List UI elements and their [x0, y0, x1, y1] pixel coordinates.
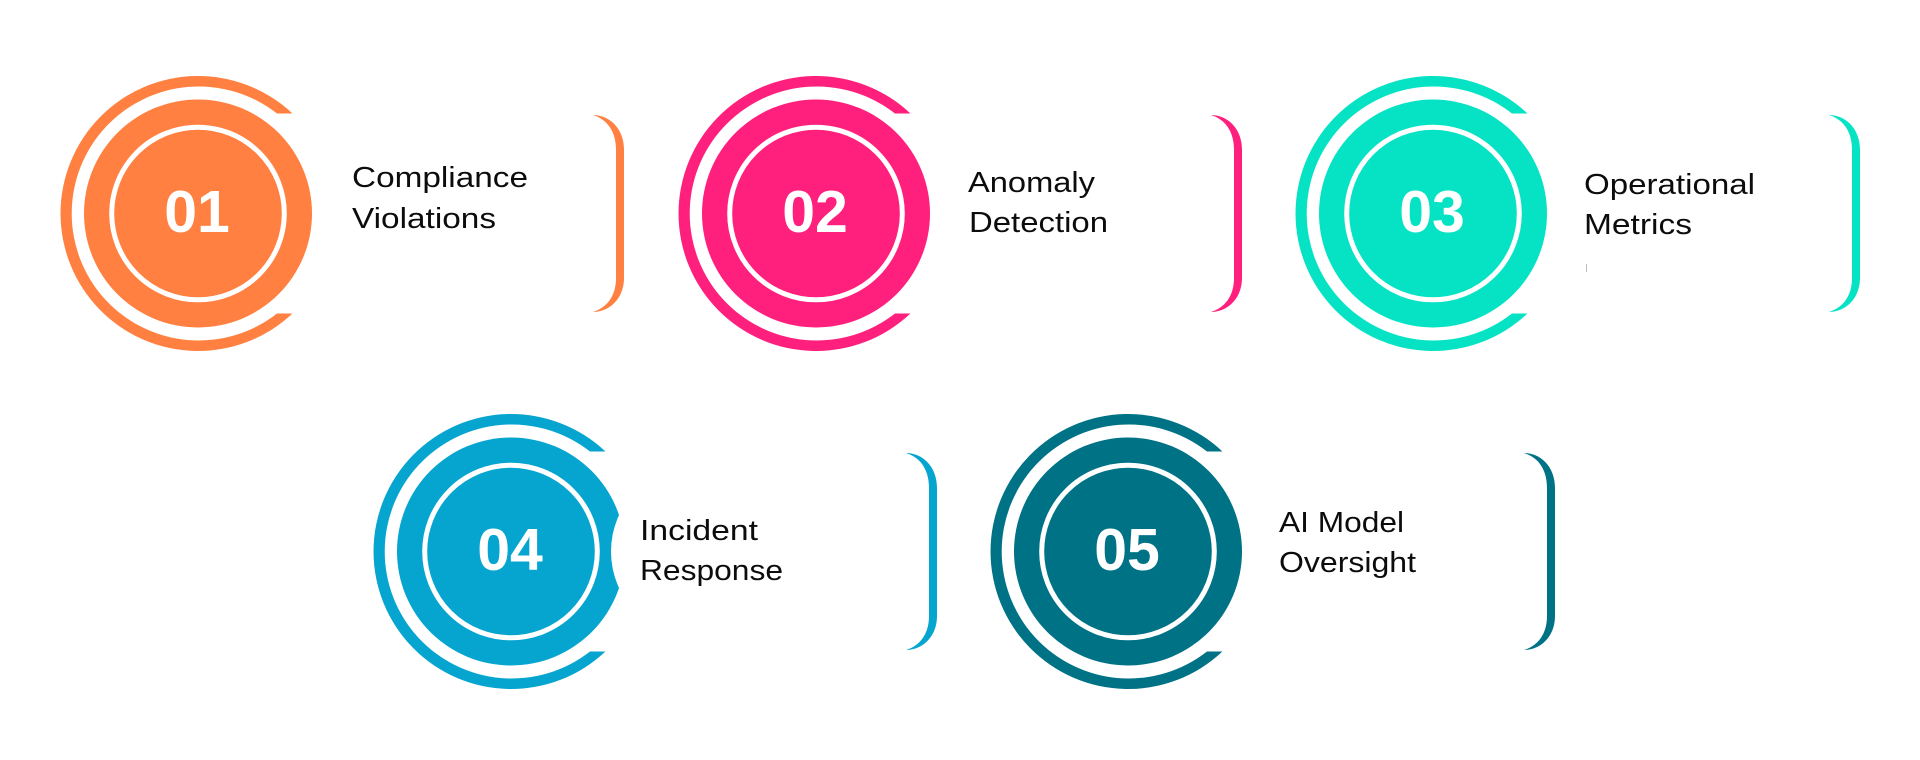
- bracket 02: [1211, 115, 1242, 312]
- label: Operational Metrics: [1584, 169, 1755, 241]
- item 03: Operational Metrics: [1296, 76, 1860, 351]
- badge 02: 02: [782, 179, 848, 245]
- label: Incident Response: Incident: [640, 515, 758, 547]
- label: AI Model Oversight: [1279, 507, 1416, 579]
- label: Anomaly Detection: Anomaly: [968, 167, 1096, 199]
- item 05: AI Model Oversight: [991, 414, 1555, 689]
- label: Anomaly Detection: Detection: [969, 207, 1108, 239]
- label: Incident Response: [640, 515, 783, 587]
- label: AI Model Oversight: Oversight: [1279, 547, 1416, 579]
- bracket 05: [1524, 453, 1555, 650]
- badge 05: [991, 414, 1242, 689]
- item 01: Compliance Violations: [61, 76, 624, 351]
- badge 04: 04: [477, 517, 543, 583]
- label: AI Model Oversight: AI Model: [1279, 507, 1404, 539]
- bracket 03: [1829, 115, 1860, 312]
- label: Compliance Violations: Compliance: [352, 162, 528, 194]
- label: Compliance Violations: [352, 162, 528, 235]
- badge 04: [374, 414, 785, 689]
- bracket 04: [906, 453, 937, 650]
- badge 03: 03: [1399, 179, 1465, 245]
- badge 02: [679, 76, 930, 351]
- label: Operational Metrics: Metrics: [1584, 209, 1692, 241]
- label: Compliance Violations: Violations: [352, 203, 496, 235]
- label: Operational Metrics: Operational: [1584, 169, 1755, 201]
- stray tick mark: [1586, 264, 1587, 272]
- badge 03: [1296, 76, 1547, 351]
- badge 01: [61, 76, 312, 351]
- item 02: Anomaly Detection: [679, 76, 1242, 351]
- badge 01: 01: [164, 179, 230, 245]
- item 04: Incident Response: [374, 414, 937, 689]
- label: Incident Response: Response: [640, 555, 783, 587]
- label: Anomaly Detection: [968, 167, 1108, 239]
- bracket 01: [593, 115, 624, 312]
- badge 05: 05: [1094, 517, 1160, 583]
